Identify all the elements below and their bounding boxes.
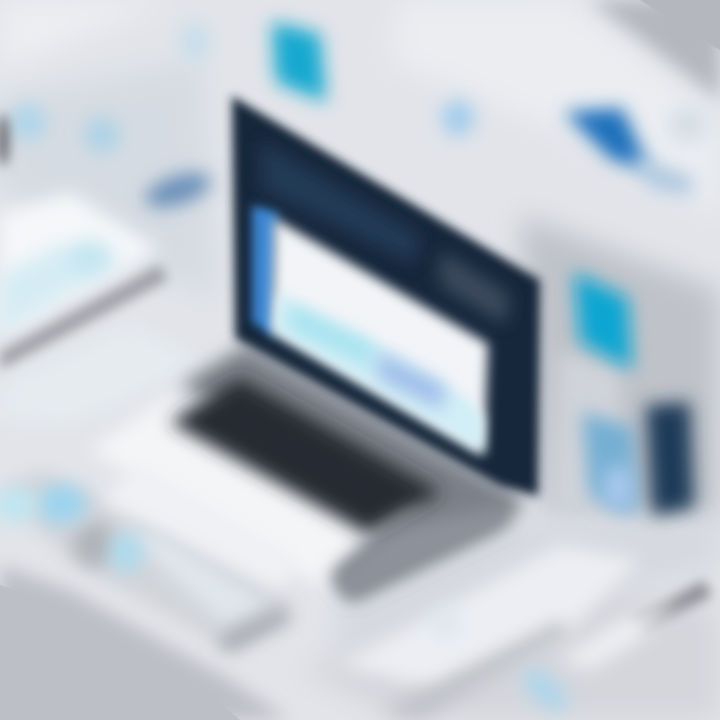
light blue phone (582, 412, 636, 516)
left tablet panel (0, 192, 168, 370)
white laptop deck (90, 395, 360, 590)
lower left white sheet (0, 325, 205, 425)
laptop base (180, 345, 525, 600)
screen white content (272, 218, 488, 456)
lower right sheet (340, 545, 712, 720)
left background dots (0, 22, 210, 166)
lower left card (0, 465, 300, 652)
cyan card right (574, 272, 632, 370)
dark phone (646, 402, 694, 516)
cyan card top (272, 22, 326, 102)
blue dot top (442, 100, 474, 136)
blue shape top right (564, 107, 708, 196)
keyboard (170, 378, 442, 534)
blue swoosh left (141, 166, 215, 214)
laptop screen frame (232, 96, 540, 496)
screen blue side bar (252, 205, 278, 338)
